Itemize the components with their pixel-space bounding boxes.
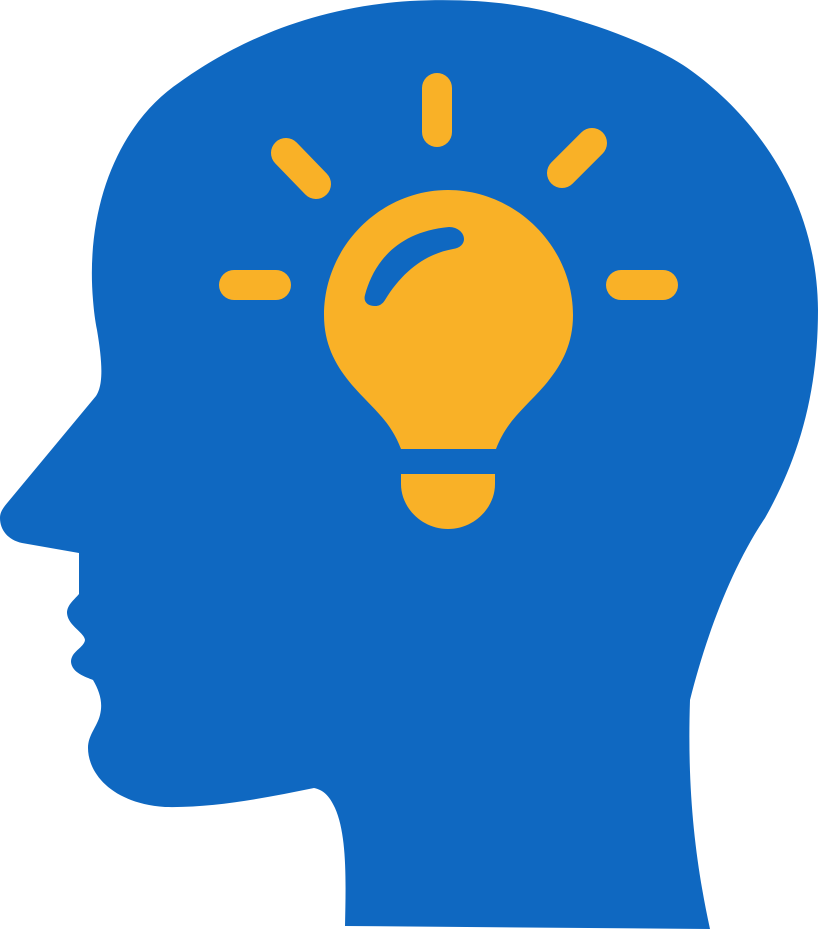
icon: light bulb — [324, 190, 573, 529]
bulb highlight — [365, 227, 464, 306]
icon: light rays — [234, 88, 663, 285]
bulb base — [401, 474, 495, 529]
bulb globe — [324, 190, 573, 449]
